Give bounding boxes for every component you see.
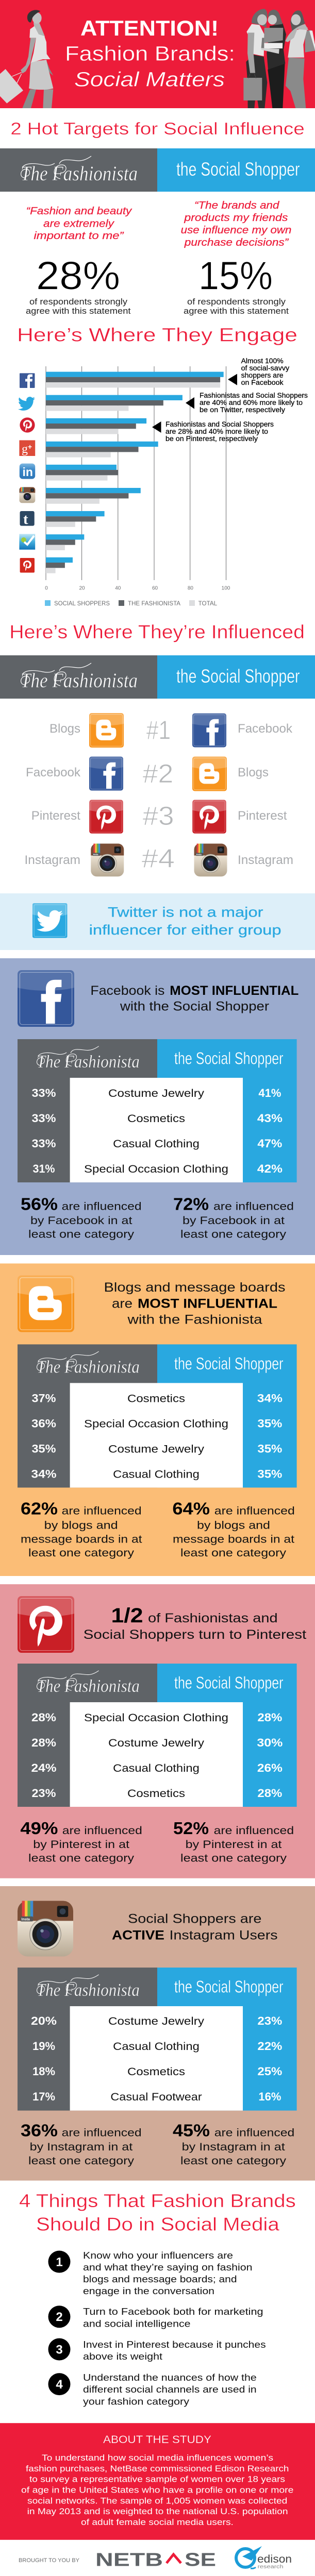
rank 1 row: Facebook: [238, 722, 293, 736]
statistic: fashionista 62%: [21, 1499, 142, 1559]
logo: netbase: NETB: [95, 2549, 163, 2570]
heading: 4 things: 4 Things That Fashion Brands: [19, 2190, 296, 2211]
heading: MOST INFLUENTIAL: [170, 984, 299, 998]
statistic: social shopper 72%: by Facebook in at: [183, 1214, 285, 1227]
statistic: fashionista 56%: are influenced: [62, 1200, 142, 1213]
table: The Fashionista: [37, 1052, 140, 1072]
statistic: social shopper 64%: are influenced: [214, 1505, 295, 1517]
callout: twitter note: be on Twitter, respectively: [200, 406, 285, 414]
caption: agree with this statement: [26, 306, 131, 316]
rank 2 row: [26, 756, 269, 791]
table: Costume Jewelry: [108, 1737, 205, 1749]
panel: instagram: [0, 1886, 315, 2180]
bar chart: social network engagement: [18, 357, 308, 607]
table: 22%: [257, 2040, 282, 2053]
table: 26%: [257, 1761, 283, 1774]
x axis labels: 60: [152, 586, 158, 591]
item 3: 3: [56, 2343, 63, 2357]
statistic: fashionista 49%: least one category: [28, 1852, 134, 1864]
item 4: your fashion category: [83, 2396, 190, 2406]
table: 18%: [32, 2065, 55, 2078]
heading: ABOUT THE STUDY: [103, 2433, 211, 2446]
item 4: different social channels are used in: [83, 2384, 257, 2395]
item 2: and social intelligence: [83, 2318, 191, 2329]
statistic: social shopper 64%: least one category: [180, 1547, 286, 1559]
body text: To understand how social media influences women’s: [42, 2453, 273, 2463]
title: Social Matters: [74, 68, 225, 91]
item 3: Invest in Pinterest because it punches: [83, 2339, 266, 2350]
table: the Social Shopper: [174, 1354, 284, 1373]
statistic: fashionista 36%: 36%: [21, 2121, 58, 2140]
table: 23%: [32, 1787, 56, 1800]
photo: three women with shopping bags: [243, 9, 315, 108]
statistic: fashionista 49%: [20, 1819, 142, 1864]
legend: TOTAL: [198, 600, 217, 607]
heading: 4 things: [19, 2190, 296, 2235]
icon: google plus: [19, 440, 35, 456]
heading: Facebook is: [90, 984, 164, 998]
callout: facebook note: [228, 357, 289, 386]
table: Cosmetics: [127, 1788, 185, 1800]
table: Costume Jewelry: [108, 1443, 205, 1455]
list: recommendations: [48, 2250, 266, 2406]
x axis labels: 80: [188, 586, 193, 591]
statistic: fashionista 62%: 62%: [21, 1499, 58, 1518]
table: 33%: [32, 1112, 56, 1125]
heading: Blogs and message boards: [104, 1280, 286, 1295]
table: Special Occasion Clothing: [84, 1418, 228, 1430]
caption: [184, 297, 289, 316]
title: [65, 16, 235, 91]
rank 2 row: #2: [143, 759, 173, 788]
logo: edison research: research: [258, 2564, 284, 2570]
icon: tumblr: t: [23, 511, 28, 528]
callout: facebook note: on Facebook: [241, 379, 284, 386]
heading: are: [112, 1296, 132, 1311]
icon: linkedin: in: [23, 465, 33, 479]
icon: facebook: [20, 373, 35, 388]
table: [18, 1344, 297, 1487]
rank 1 row: Blogs: [49, 722, 80, 736]
table: 17%: [32, 2090, 55, 2103]
statistic: fashionista 62%: by blogs and: [44, 1519, 118, 1531]
heading: [112, 1912, 278, 1942]
statistic: social shopper 45%: least one category: [180, 2155, 286, 2167]
logo: edison research: edison: [257, 2553, 292, 2565]
panel: two target groups header: [0, 148, 315, 192]
icon: linkedin: [20, 464, 35, 479]
icon: google plus: g: [22, 443, 28, 456]
statistic: social shopper 45%: [173, 2121, 294, 2167]
table: 35%: [32, 1442, 56, 1455]
heading: Social Shoppers turn to Pinterest: [84, 1628, 306, 1642]
quote: use influence my own: [181, 224, 292, 236]
table: 43%: [257, 1112, 283, 1125]
table: 24%: [31, 1761, 57, 1774]
item 1: Know who your influencers are: [83, 2250, 233, 2261]
rank 4 row: #4: [142, 844, 175, 873]
icon: pinterest square: [20, 558, 35, 573]
table: 23%: [257, 2014, 282, 2027]
table: Cosmetics: [127, 2066, 185, 2078]
panel: about the study: [0, 2423, 315, 2540]
table: 41%: [258, 1087, 281, 1099]
heading: 4 things: Should Do in Social Media: [36, 2214, 280, 2235]
heading: Instagram Users: [169, 1928, 278, 1942]
item 3: [48, 2338, 266, 2362]
rank 4 row: Instagram: [25, 853, 80, 867]
statistic: social shopper 45%: by Instagram in at: [182, 2141, 285, 2153]
heading: [104, 1280, 286, 1327]
body text: in May 2013 and is weighted to the national U.S. population: [27, 2506, 288, 2516]
caption: [26, 297, 131, 316]
statistic: fashionista 62%: message boards in at: [21, 1533, 142, 1545]
table: 19%: [32, 2040, 55, 2053]
statistic: 15%: 15%: [198, 253, 273, 298]
statistic: social shopper 45%: 45%: [173, 2121, 210, 2140]
statistic: fashionista 56%: least one category: [28, 1228, 134, 1241]
statistic: social shopper 72%: 72%: [173, 1195, 209, 1214]
item 1: 1: [56, 2256, 63, 2269]
statistic: fashionista 62%: are influenced: [62, 1505, 142, 1517]
x axis labels: 40: [115, 586, 121, 591]
icon: twitter: [18, 397, 35, 411]
heading: with the Fashionista: [127, 1312, 262, 1327]
rank 1 row: #1: [146, 715, 171, 745]
statistic: social shopper 52%: least one category: [180, 1852, 287, 1864]
table: 33%: [32, 1137, 56, 1150]
table: 30%: [257, 1736, 283, 1749]
panel: social shopper quote and statistic: [181, 199, 292, 316]
quote: “Fashion and beauty: [26, 205, 132, 217]
footer: sponsors: [19, 2546, 292, 2570]
statistic: fashionista 36%: are influenced: [62, 2126, 142, 2139]
logo: the fashionista: The Fashionista: [21, 669, 138, 692]
table: 35%: [257, 1467, 282, 1480]
table: 20%: [31, 2014, 57, 2027]
quote: are extremely: [43, 217, 115, 230]
heading: ACTIVE: [112, 1928, 164, 1942]
item 4: 4: [56, 2378, 63, 2392]
rank 3 row: #3: [143, 801, 174, 831]
heading: of Fashionistas and: [148, 1611, 278, 1625]
text: influencer for either group: [89, 922, 281, 938]
body text: of adult female social media users.: [81, 2517, 234, 2527]
table: the Social Shopper: [174, 1673, 284, 1692]
table: 34%: [257, 1392, 283, 1404]
icon: blogger: [18, 1276, 74, 1332]
rank 3 row: [31, 800, 287, 834]
quote: important to me”: [34, 230, 124, 242]
table: 31%: [33, 1162, 55, 1175]
heading: with the Social Shopper: [120, 999, 269, 1013]
logo: edison research: [236, 2546, 292, 2570]
credit line: BROUGHT TO YOU BY: [19, 2557, 80, 2564]
rank 3 row: Pinterest: [238, 809, 287, 823]
panel: facebook: [0, 958, 315, 1255]
rank 2 row: Blogs: [238, 766, 269, 779]
table: 35%: [257, 1417, 282, 1430]
heading: [90, 984, 299, 1013]
table: 28%: [257, 1787, 282, 1800]
icon: instagram: [18, 1901, 73, 1957]
logo: netbase: [95, 2549, 216, 2570]
icon: pinterest: [18, 1596, 74, 1653]
heading: 2 hot targets: 2 Hot Targets for Social Influence: [10, 119, 305, 138]
quote: [26, 205, 132, 242]
body text: [21, 2453, 293, 2527]
series: the fashionista bars: [46, 377, 220, 568]
icon: foursquare: [19, 534, 35, 550]
table: [18, 1039, 297, 1182]
x axis labels: 100: [222, 586, 230, 591]
item 4: [48, 2372, 257, 2406]
caption: of respondents strongly: [187, 297, 286, 307]
table: 36%: [31, 1417, 56, 1430]
quote: products my friends: [184, 212, 288, 224]
table: Casual Clothing: [113, 1762, 200, 1774]
table: Casual Clothing: [113, 1468, 200, 1480]
table: 16%: [258, 2090, 281, 2103]
icon: twitter: [32, 903, 67, 938]
statistic: social shopper 72%: least one category: [180, 1228, 286, 1241]
statistic: social shopper 64%: 64%: [172, 1499, 210, 1518]
callout: pinterest note: be on Pinterest, respectively: [165, 435, 258, 443]
statistic: social shopper 52%: 52%: [173, 1819, 209, 1838]
heading: MOST INFLUENTIAL: [138, 1296, 277, 1311]
item 1: [48, 2250, 253, 2296]
statistic: fashionista 36%: least one category: [28, 2155, 134, 2167]
table: Costume Jewelry: [108, 1088, 205, 1099]
body text: social networks. The sample of 1,005 women was collected: [27, 2496, 287, 2505]
table: 42%: [257, 1162, 283, 1175]
statistic: 28%: 28%: [36, 253, 120, 298]
title: Fashion Brands:: [65, 42, 235, 65]
x axis labels: 0: [45, 586, 48, 591]
statistic: social shopper 72%: are influenced: [213, 1200, 294, 1213]
table: 37%: [32, 1392, 56, 1404]
x axis labels: 20: [79, 586, 85, 591]
logo: the fashionista: The Fashionista: [21, 162, 138, 185]
logo: netbase: SE: [185, 2549, 216, 2570]
rank 2 row: Facebook: [26, 766, 81, 779]
panel: two target groups header (influence): [0, 655, 315, 699]
heading: Social Shoppers are: [128, 1912, 261, 1926]
table: 47%: [257, 1137, 282, 1150]
table: The Fashionista: [37, 1676, 140, 1696]
statistic: fashionista 62%: least one category: [28, 1547, 134, 1559]
icon: facebook: [18, 970, 74, 1027]
statistic: fashionista 36%: by Instagram in at: [30, 2141, 132, 2153]
table: Cosmetics: [127, 1393, 185, 1404]
callout: twitter note: are 40% and 60% more likely to: [200, 399, 303, 406]
statistic: fashionista 49%: 49%: [20, 1819, 58, 1838]
statistic: fashionista 36%: [21, 2121, 142, 2167]
item 1: and what they’re saying on fashion: [83, 2262, 253, 2273]
statistic: social shopper 45%: are influenced: [214, 2126, 294, 2139]
table: Special Occasion Clothing: [84, 1163, 228, 1175]
statistic: social shopper 64%: by blogs and: [197, 1519, 270, 1531]
callout: facebook note: of social-savvy: [241, 364, 289, 372]
rank 3 row: Pinterest: [31, 809, 80, 823]
rank 1 row: [49, 713, 293, 748]
item 3: above its weight: [83, 2351, 162, 2362]
table: The Fashionista: [37, 1357, 140, 1377]
heading: 1/2: [111, 1604, 143, 1627]
table: The Fashionista: [37, 1980, 140, 2000]
item 2: 2: [56, 2310, 63, 2324]
caption: of respondents strongly: [29, 297, 128, 307]
table: 28%: [31, 1736, 56, 1749]
text: Twitter is not a major: [108, 905, 263, 920]
callout: pinterest note: are 28% and 40% more likely to: [165, 428, 268, 435]
item 1: engage in the conversation: [83, 2285, 214, 2296]
text: [89, 905, 281, 938]
item 4: Understand the nuances of how the: [83, 2372, 257, 2383]
item 1: blogs and message boards; and: [83, 2274, 237, 2284]
series: social shoppers bars: [46, 372, 224, 563]
icon: pinterest circle: [20, 417, 35, 433]
table: the Social Shopper: [174, 1977, 284, 1996]
panel: influence ranking: [25, 713, 293, 876]
statistic: social shopper 52%: [173, 1819, 294, 1864]
table: [18, 1664, 297, 1807]
statistic: social shopper 64%: message boards in at: [173, 1533, 294, 1545]
table: Costume Jewelry: [108, 2015, 205, 2027]
heading: [84, 1604, 306, 1642]
table: 28%: [31, 1711, 56, 1724]
statistic: fashionista 49%: are influenced: [62, 1824, 142, 1837]
body text: fashion purchases, NetBase commissioned Edison Research: [26, 2464, 289, 2473]
icon: instagram: [19, 487, 35, 503]
rank 4 row: [25, 843, 293, 876]
panel: fashionista quote and statistic: [26, 205, 132, 316]
table: 34%: [31, 1467, 57, 1480]
panel: twitter callout: [0, 893, 315, 950]
table: the Social Shopper: [174, 1049, 284, 1067]
icon: tumblr: [20, 511, 35, 528]
statistic: social shopper 64%: [172, 1499, 295, 1559]
callout: facebook note: shoppers are: [241, 371, 284, 379]
statistic: fashionista 56%: [21, 1195, 142, 1241]
series: total bars: [46, 382, 220, 573]
photo: woman with shopping bag: [0, 10, 53, 108]
callout: pinterest note: Fashionistas and Social Shoppers: [165, 420, 274, 428]
table: Casual Footwear: [110, 2091, 202, 2103]
table: 25%: [257, 2065, 282, 2078]
heading: where they're influenced: Here’s Where They’re Influenced: [9, 621, 305, 642]
item 2: Turn to Facebook both for marketing: [83, 2306, 263, 2317]
table: Cosmetics: [127, 1113, 185, 1125]
quote: “The brands and: [194, 199, 279, 211]
quote: purchase decisions”: [184, 236, 289, 248]
table: Casual Clothing: [113, 1138, 200, 1150]
table: 33%: [32, 1087, 56, 1099]
statistic: social shopper 52%: are influenced: [214, 1824, 294, 1837]
callout: twitter note: Fashionistas and Social Shoppers: [200, 392, 308, 399]
table: [18, 1968, 297, 2111]
body text: of age in the United States who have a profile on one or more: [21, 2485, 293, 2495]
body text: to survey a representative sample of women over 18 years: [29, 2474, 285, 2484]
callout: facebook note: Almost 100%: [241, 357, 284, 365]
legend: THE FASHIONISTA: [128, 600, 180, 607]
hero banner: [0, 0, 315, 108]
statistic: fashionista 49%: by Pinterest in at: [33, 1838, 129, 1851]
item 2: [48, 2306, 263, 2329]
rank 4 row: Instagram: [238, 853, 293, 867]
panel: blogs: [0, 1263, 315, 1576]
table: Casual Clothing: [113, 2041, 200, 2053]
table: 28%: [257, 1711, 282, 1724]
panel: pinterest: [0, 1584, 315, 1878]
statistic: fashionista 56%: 56%: [21, 1195, 58, 1214]
legend: [45, 600, 217, 607]
callout: pinterest note: [152, 420, 274, 443]
title: ATTENTION!: [80, 16, 219, 40]
legend: SOCIAL SHOPPERS: [54, 600, 110, 607]
statistic: fashionista 56%: by Facebook in at: [30, 1214, 132, 1227]
table: Special Occasion Clothing: [84, 1712, 228, 1724]
table: 35%: [257, 1442, 282, 1455]
x axis labels: [45, 586, 230, 591]
statistic: social shopper 52%: by Pinterest in at: [186, 1838, 281, 1851]
heading: where they engage: Here’s Where They Engage: [17, 325, 297, 346]
quote: [181, 199, 292, 248]
statistic: social shopper 72%: [173, 1195, 294, 1241]
icon: google plus: +: [28, 443, 32, 451]
callout: twitter note: [186, 392, 308, 414]
caption: agree with this statement: [184, 306, 289, 316]
